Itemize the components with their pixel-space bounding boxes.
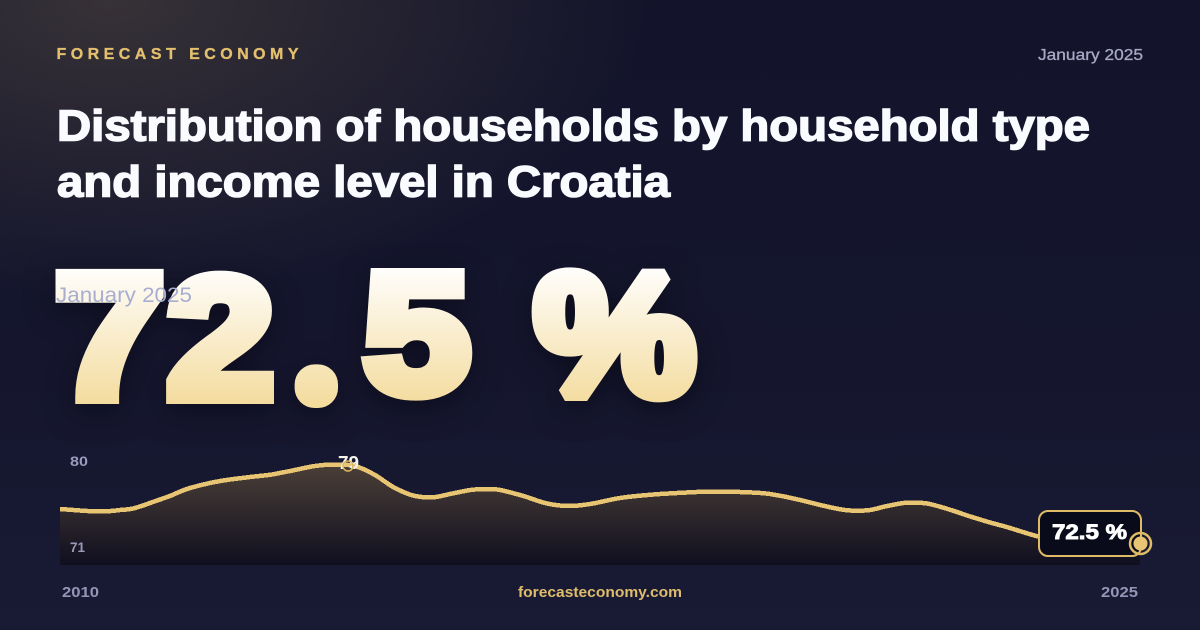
title: Distribution of households by household type (57, 102, 1090, 150)
big value: % (534, 239, 695, 431)
chart line (60, 464, 1040, 537)
big value: . (313, 367, 320, 394)
current value badge (1039, 511, 1141, 556)
title (57, 102, 1090, 206)
end year label: 2025 (1101, 585, 1138, 601)
peak marker (343, 461, 353, 471)
start year label: 2010 (62, 585, 99, 601)
source url: forecasteconomy.com (518, 585, 682, 601)
area chart (60, 453, 1151, 565)
axis min label: 71 (70, 540, 85, 555)
title: and income level in Croatia (57, 158, 671, 206)
chart area fill (60, 464, 1140, 565)
peak value label: 79 (338, 453, 359, 473)
current value badge: 72.5 % (1052, 521, 1127, 544)
date overlay on big value: January 2025 (56, 284, 192, 307)
big value: 7 (55, 238, 165, 435)
big value: 2 (167, 243, 274, 434)
axis max label: 80 (70, 454, 88, 469)
date label top right: January 2025 (1038, 47, 1143, 64)
big value (55, 238, 695, 435)
big value: 5 (364, 239, 470, 429)
current value marker (1130, 533, 1151, 554)
brand label: FORECAST ECONOMY (56, 46, 299, 63)
